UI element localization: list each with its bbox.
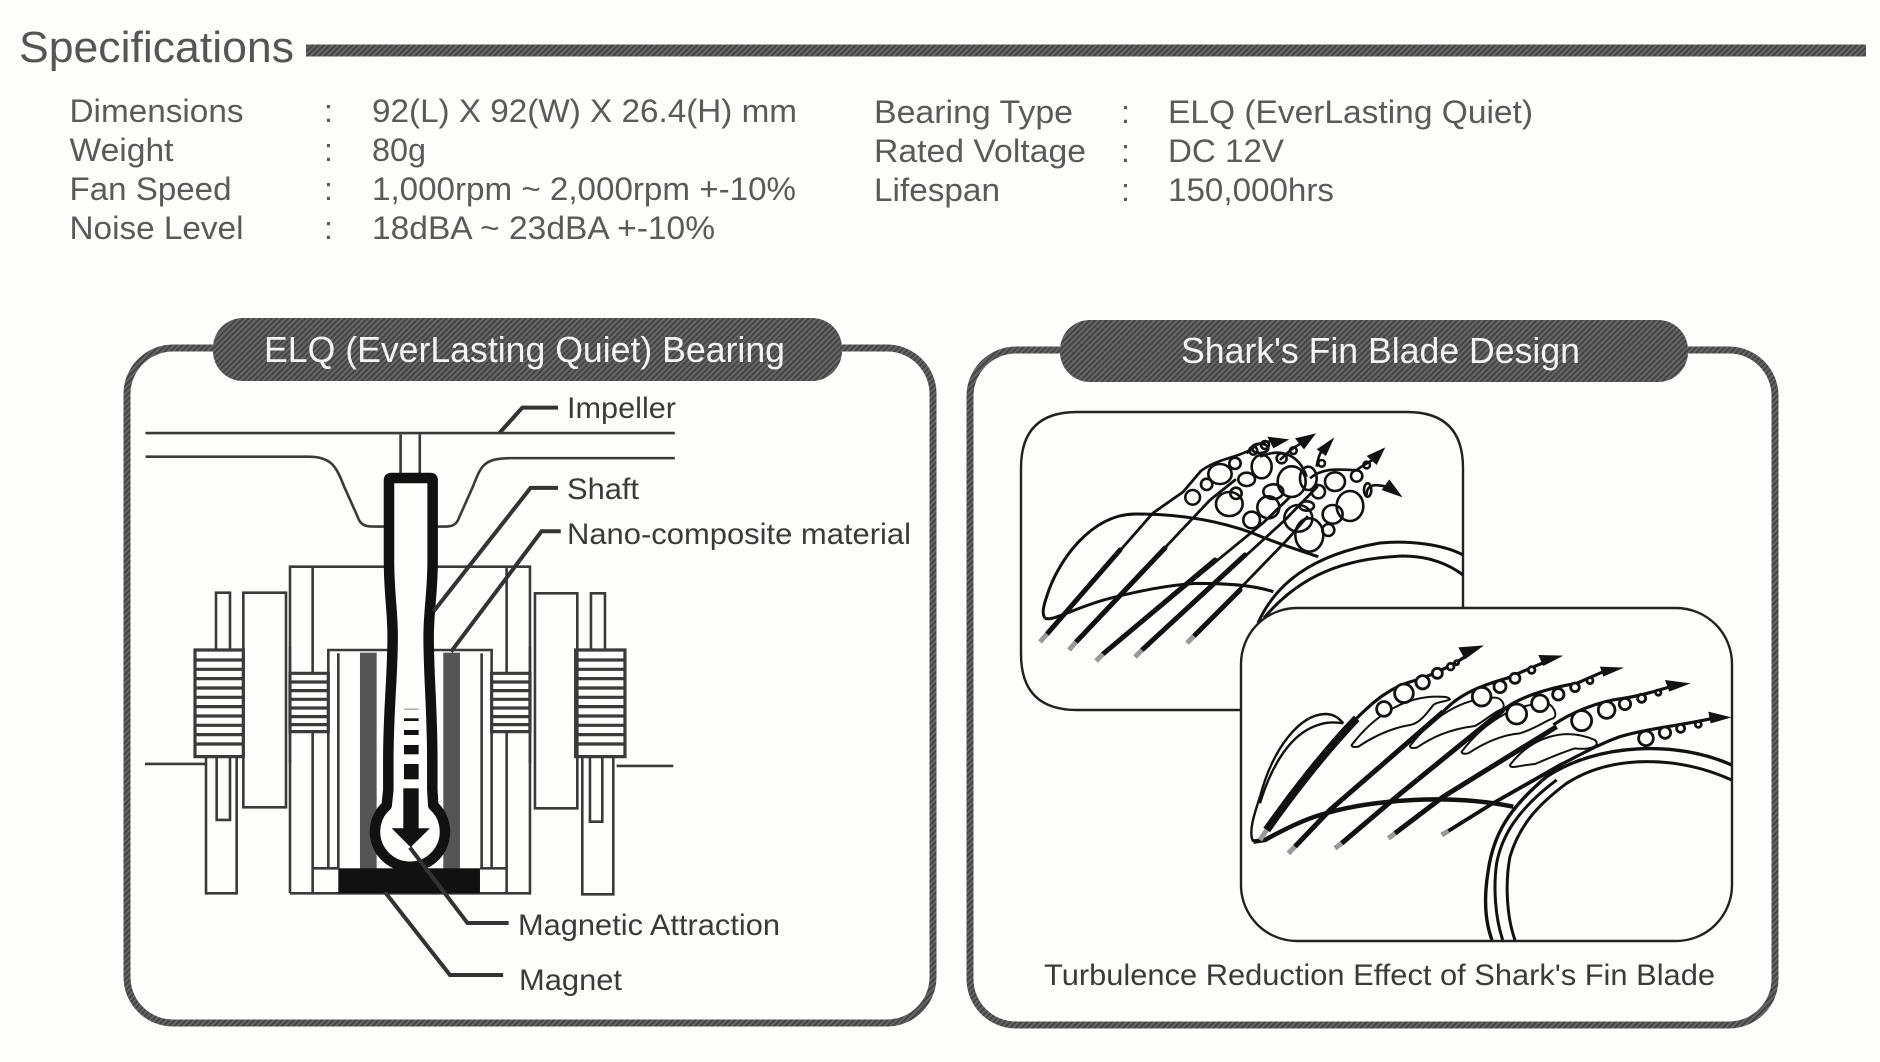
labels: bearing parts: Shaft	[567, 473, 640, 506]
text block: specifications right column: DC 12V	[1168, 133, 1285, 169]
magnet	[338, 868, 480, 893]
text block: specifications left column: :	[324, 132, 333, 168]
text block: specifications left column: Dimensions	[70, 93, 244, 129]
magnetic attraction arrow	[392, 709, 430, 847]
diagram: turbulent airflow on standard blade	[1021, 412, 1463, 710]
front blade	[1251, 714, 1343, 842]
heading pill: ELQ (EverLasting Quiet) Bearing: ELQ (EverLasting Quiet) Bearing	[264, 329, 785, 370]
airflow streaks	[1047, 472, 1317, 654]
text block: specifications right column: 150,000hrs	[1168, 172, 1334, 208]
text block: specifications left column: 18dBA ~ 23dBA +-10%	[372, 210, 715, 246]
heading pill: Shark's Fin Blade Design	[1060, 320, 1688, 382]
motor housing and stator	[145, 567, 673, 894]
text block: specifications right column: :	[1121, 172, 1130, 208]
caption: Turbulence Reduction Effect of Shark's Fin Blade	[1044, 959, 1715, 992]
text block: specifications right column: Bearing Type	[874, 94, 1073, 130]
heading: Specifications	[19, 23, 1866, 72]
blade outline	[1043, 514, 1318, 619]
diagram: impeller and leader lines	[146, 433, 675, 527]
labels: bearing parts: Impeller	[567, 392, 676, 425]
text block: specifications left column	[70, 93, 797, 246]
heading pill: Shark's Fin Blade Design: Shark's Fin Blade Design	[1181, 330, 1580, 371]
hub arcs	[1486, 749, 1732, 940]
heading pill: ELQ (EverLasting Quiet) Bearing	[213, 318, 842, 381]
panel: Shark's Fin Blade Design	[970, 320, 1775, 1025]
text block: specifications left column: 1,000rpm ~ 2,000rpm +-10%	[372, 171, 796, 207]
text block: specifications left column: :	[324, 171, 333, 207]
text block: specifications right column: Rated Voltage	[874, 133, 1086, 169]
turbulence bubbles	[1185, 441, 1371, 552]
flow trails	[1357, 653, 1717, 763]
streak tips	[1040, 634, 1194, 661]
labels: bearing parts: Nano-composite material	[567, 518, 911, 551]
airflow streaks	[1267, 710, 1563, 847]
text block: specifications left column: :	[324, 93, 333, 129]
diagram: reduced turbulence on shark fin blade	[1241, 608, 1732, 941]
text block: specifications right column: ELQ (EverLasting Quiet)	[1168, 94, 1533, 130]
fins	[1352, 697, 1597, 767]
inset frame	[1021, 412, 1463, 710]
text block: specifications left column: 92(L) X 92(W) X 26.4(H) mm	[372, 93, 797, 129]
diagram: motor cross-section	[145, 478, 673, 894]
shaft	[375, 478, 445, 867]
labels: bearing parts: Magnetic Attraction	[518, 909, 780, 942]
text block: specifications left column: :	[324, 210, 333, 246]
nano-composite sleeves	[360, 653, 460, 869]
hub arcs	[1258, 542, 1463, 623]
text block: specifications right column: :	[1121, 133, 1130, 169]
impeller profile	[146, 433, 675, 527]
text block: specifications right column: Lifespan	[874, 172, 1000, 208]
text block: specifications left column: Noise Level	[70, 210, 244, 246]
inset frame	[1241, 608, 1732, 941]
smooth arrows	[1458, 645, 1732, 723]
labels: bearing parts	[518, 392, 911, 997]
text block: specifications left column: Weight	[70, 132, 174, 168]
text block: specifications right column: :	[1121, 94, 1130, 130]
coil windings	[195, 650, 625, 757]
panel: ELQ bearing	[127, 318, 933, 1023]
leader lines	[385, 408, 561, 975]
text block: specifications left column: Fan Speed	[70, 171, 232, 207]
labels: bearing parts: Magnet	[519, 964, 623, 997]
streak tips	[1260, 830, 1448, 853]
text block: specifications left column: 80g	[372, 132, 426, 168]
heading: Specifications: Specifications	[19, 23, 294, 72]
text block: specifications right column	[874, 94, 1533, 208]
smooth bubbles	[1377, 661, 1701, 746]
turbulent arrows	[1247, 433, 1403, 497]
